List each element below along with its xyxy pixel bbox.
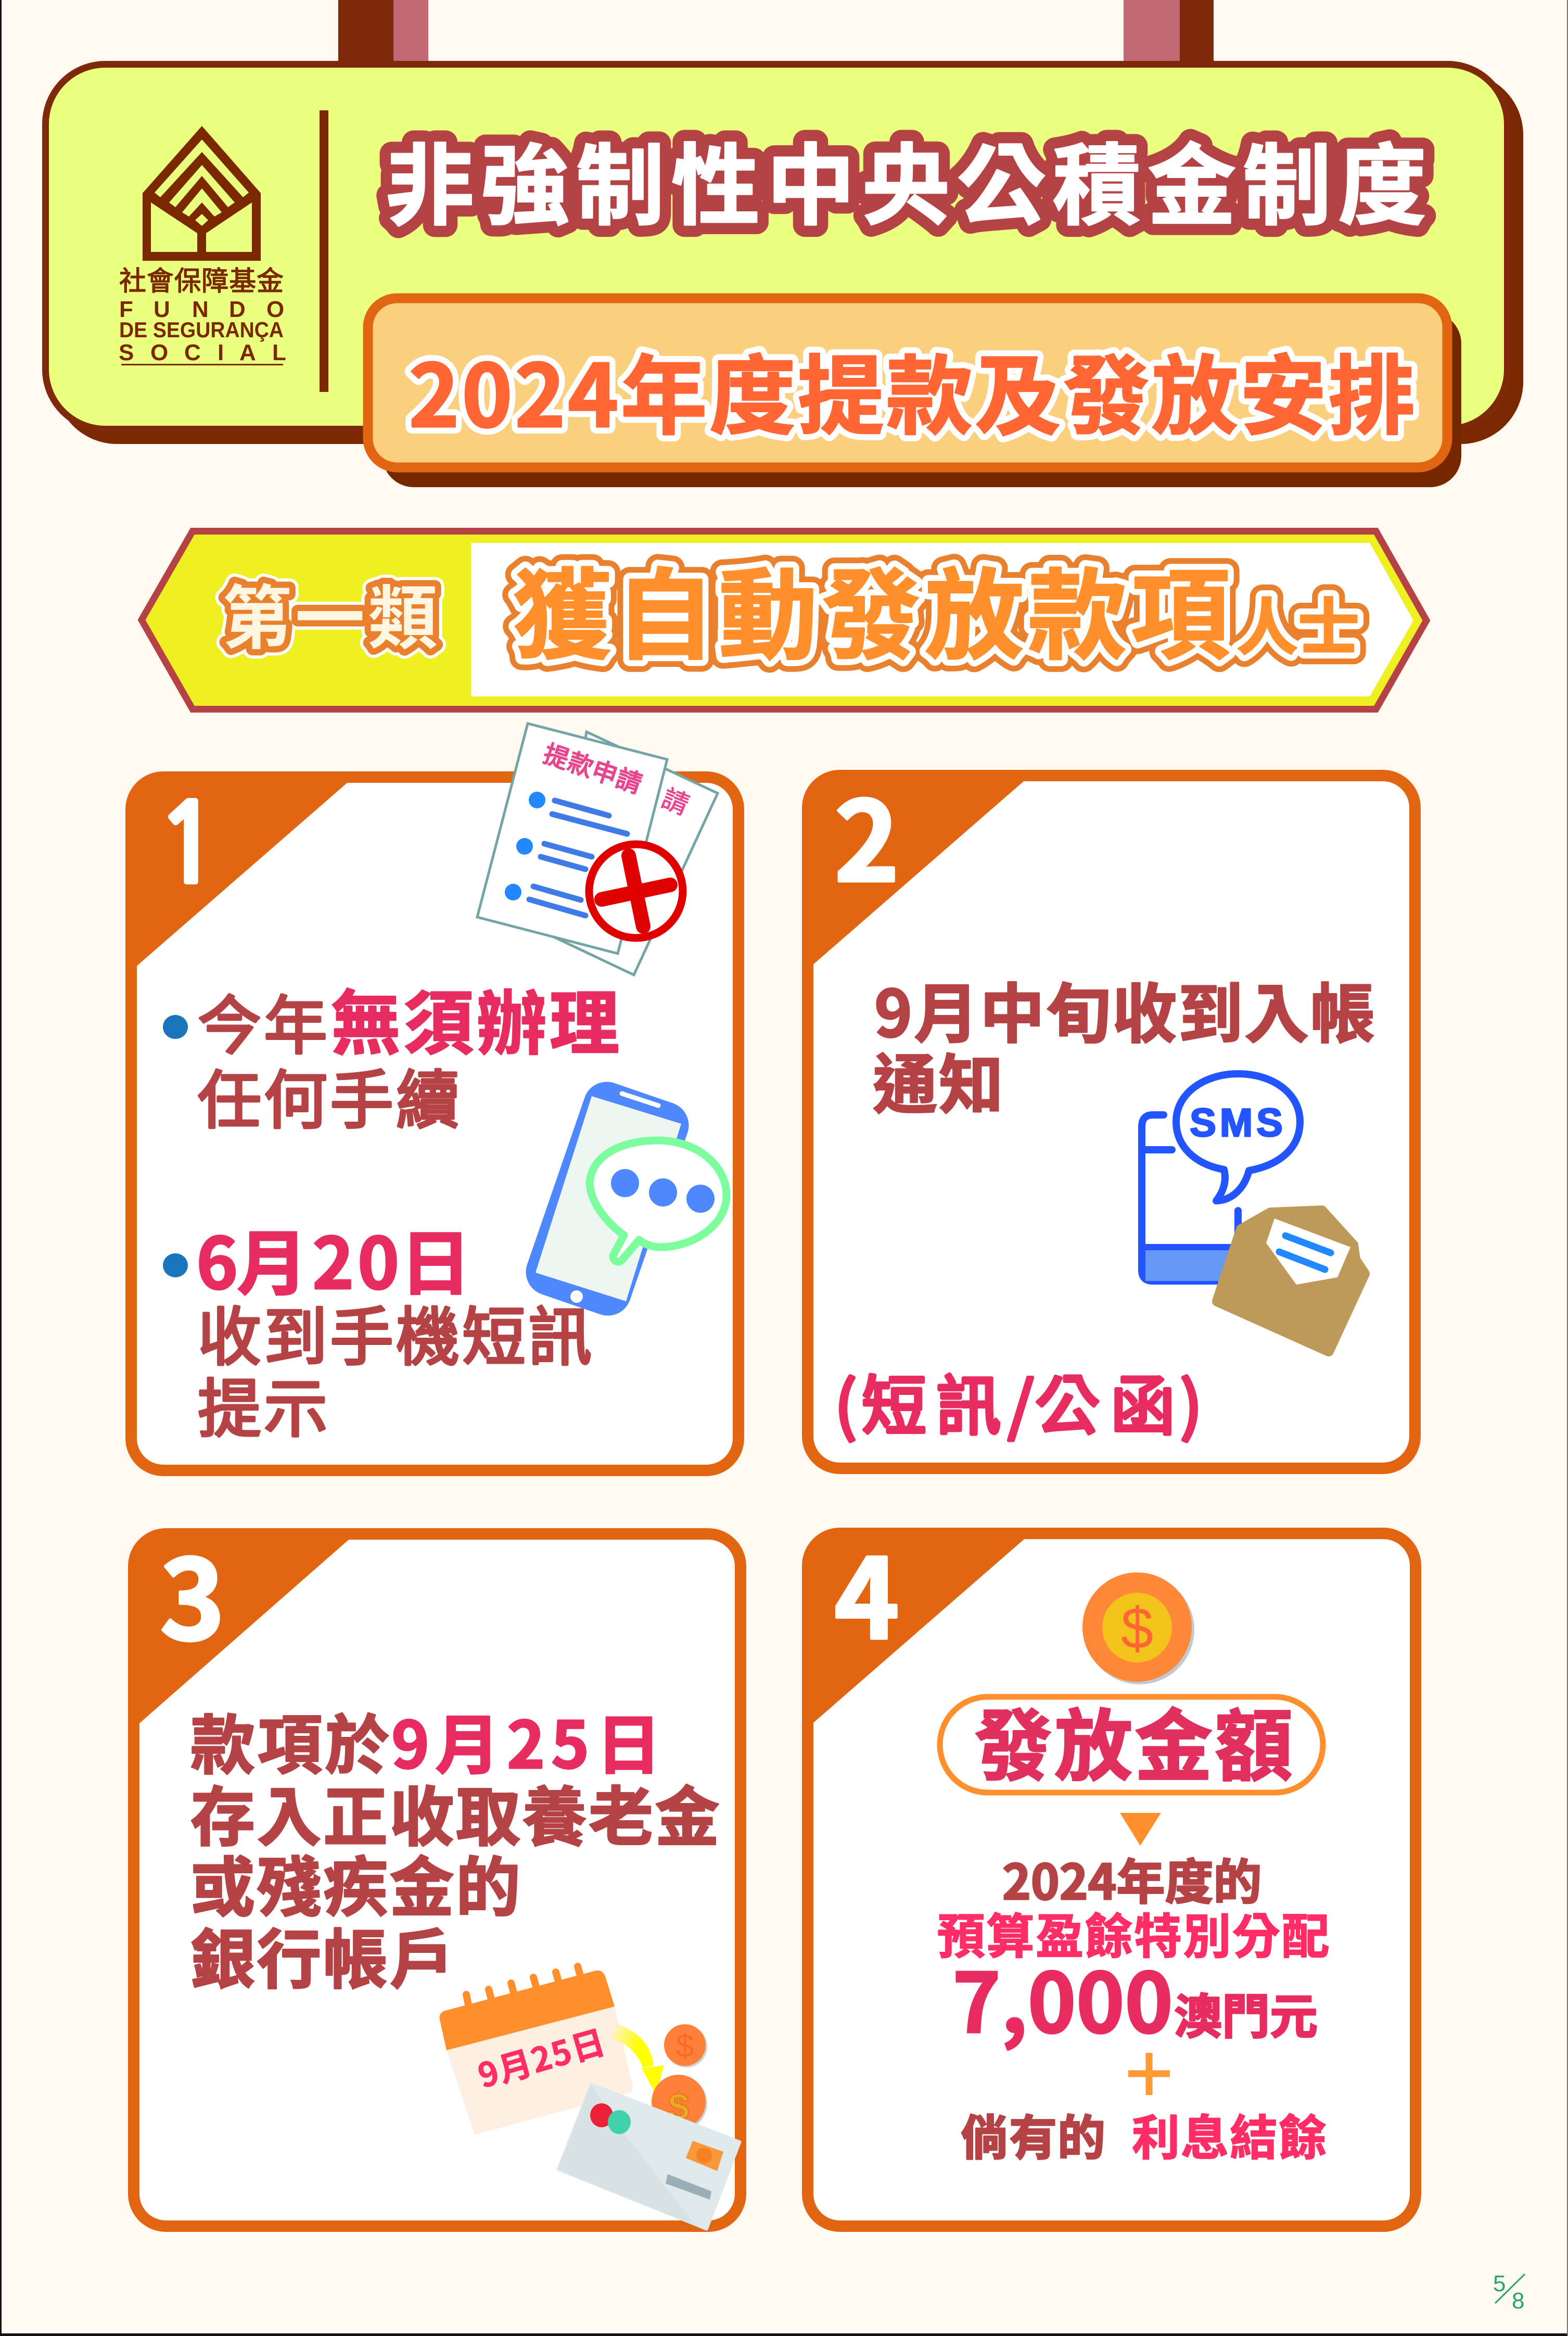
icon: dollar coin [1082,1572,1194,1684]
icon: SMS phone and envelope: SMS [1190,1101,1286,1145]
text: no procedures this year: 無須辦理 [331,968,622,1069]
icon: calendar, coins and bank card [439,1966,740,2229]
panel: step 2 [808,754,1415,1468]
panel: step 4 [808,1511,1416,2226]
icon: application forms crossed out: 提款申請 [540,733,648,801]
text: paid into bank account [190,1693,721,2001]
text: paid into bank account: 存入正收取養老金 [190,1765,721,1859]
text: June 20 SMS reminder: 提示 [198,1358,330,1450]
icon: phone with chat bubble [519,1075,726,1322]
logo: Fundo de Segurança Social: SOCIAL [119,340,286,365]
text: June 20 SMS reminder: 6月20日 [196,1207,471,1310]
text: interest balance: 利息結餘 [1132,2100,1328,2169]
panel: step 3 [134,1512,741,2229]
text: paid into bank account: 款項於 [190,1693,389,1787]
number 4: 4 [834,1511,899,1671]
category title: 人士 [1236,578,1359,667]
number 1: 1 [155,790,222,899]
plus sign [1128,2053,1170,2095]
icon: calendar, coins and bank card: 9月25日 [472,2016,611,2098]
text: amount breakdown: 預算盈餘特別分配 [937,1898,1331,1967]
category label: 第一類 [222,562,441,663]
subtitle box [368,298,1461,487]
text: SMS / official letter: (短訊/公函) [835,1354,1202,1448]
icon: calendar, coins and bank card: $ [668,2086,689,2128]
main title: 非強制性中央公積金制度 [386,115,1433,243]
logo: Fundo de Segurança Social: 社會保障基金 [119,259,284,298]
subtitle text: 2024年度提款及發放安排 [409,326,1417,452]
hanging straps [338,0,1214,65]
number 2: 2 [834,754,899,913]
category title: 獲自動發放款項 [513,536,1234,679]
text: interest balance: 倘有的 [961,2100,1106,2169]
text: June 20 SMS reminder [196,1207,594,1450]
subtitle text: 2024年度提款及發放安排 [409,326,1417,452]
text: notice in mid September [873,962,1376,1126]
bullet [163,1015,188,1039]
text: notice in mid September: 通知 [873,1033,1005,1126]
header banner [46,65,1523,444]
text: no procedures this year: 任何手續 [198,1049,462,1141]
arrow down [1120,1813,1161,1846]
page number [1493,2271,1525,2314]
logo: Fundo de Segurança Social: DE SEGURANÇA [119,318,284,342]
text: amount breakdown: 澳門元 [1174,1978,1318,2048]
category banner [142,531,1426,709]
bullet [163,1253,188,1277]
number 3: 3 [160,1512,225,1672]
icon: SMS phone and envelope [1142,1074,1365,1351]
icon: dollar coin: $ [1121,1596,1153,1661]
text: paid into bank account: 9月25日 [391,1693,661,1787]
text: no procedures this year: 今年 [198,975,330,1067]
category label: 第一類 [222,562,441,663]
text: amount breakdown: 7,000 [952,1937,1173,2056]
text: June 20 SMS reminder: 收到手機短訊 [198,1286,594,1378]
panel: step 1 [131,723,738,1470]
logo: Fundo de Segurança Social [119,126,286,365]
text: no procedures this year [198,968,622,1141]
category title: 人士 [1236,578,1359,667]
logo: Fundo de Segurança Social: FUNDO [119,297,284,322]
category title: 獲自動發放款項 [513,536,1234,679]
icon: application forms crossed out [477,723,718,975]
text: amount breakdown: 2024年度的 [1002,1843,1261,1913]
icon: application forms crossed out: 請 [657,778,695,822]
main title: 非強制性中央公積金制度 [386,115,1433,243]
payment amount pill: 發放金額 [974,1684,1295,1797]
page number: 5 [1493,2271,1506,2296]
text: paid into bank account: 銀行帳戶 [190,1908,456,2001]
text: interest balance [961,2100,1328,2169]
text: paid into bank account: 或殘疾金的 [190,1835,522,1929]
page number: 8 [1512,2288,1524,2314]
icon: calendar, coins and bank card: $ [676,2028,694,2064]
category title: 獲自動發放款項 [513,536,1234,679]
category label: 第一類 [222,562,441,663]
category title: 人士 [1236,578,1359,667]
text: notice in mid September: 9月中旬收到入帳 [874,962,1376,1056]
text: amount breakdown [937,1843,1331,2056]
